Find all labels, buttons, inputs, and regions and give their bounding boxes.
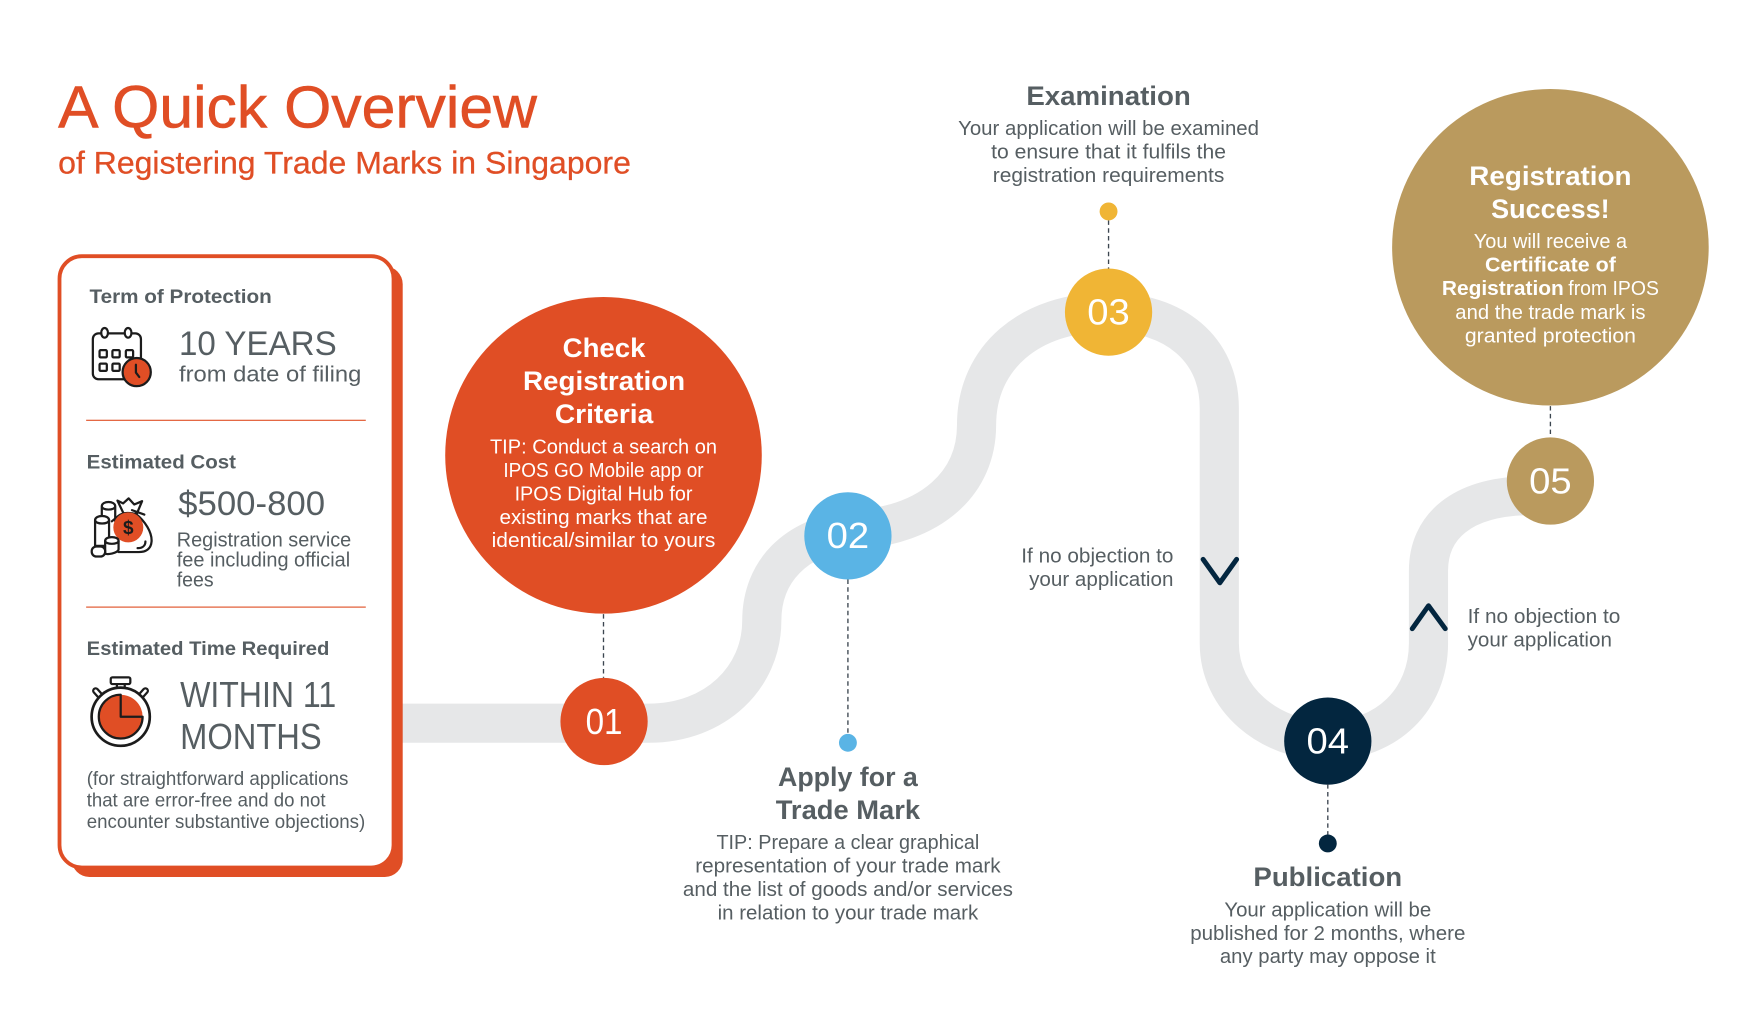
term of protection: Term of Protection <box>89 287 272 308</box>
estimated time required: encounter substantive objections) <box>87 812 365 833</box>
icon: calendar with clock <box>93 328 151 386</box>
connector and dot: step 3 <box>1100 202 1118 270</box>
text: apply for a trade mark: in relation to your trade mark <box>718 903 979 925</box>
marker 03 <box>1065 268 1152 356</box>
estimated time required: MONTHS <box>180 717 322 757</box>
text: apply for a trade mark: and the list of goods and/or services <box>683 879 1013 901</box>
text: apply for a trade mark: representation of your trade mark <box>695 856 1002 878</box>
marker 03: 03 <box>1087 292 1130 332</box>
term of protection: from date of filing <box>179 361 361 386</box>
text: publication: any party may oppose it <box>1220 946 1436 968</box>
arrow: up chevron <box>1412 606 1445 629</box>
title: of Registering Trade Marks in Singapore <box>58 145 631 180</box>
text: examination: registration requirements <box>993 165 1224 187</box>
icon: money bag and coins: $ <box>123 518 134 539</box>
note: if no objection, right <box>1468 606 1620 652</box>
estimated time required <box>87 639 365 833</box>
panel: registration success: granted protection <box>1465 326 1636 348</box>
panel: registration success <box>1392 89 1709 406</box>
panel: step 1 check registration criteria: Criteria <box>555 399 654 429</box>
term of protection <box>89 287 361 386</box>
marker 04 <box>1284 697 1371 785</box>
card body <box>60 256 394 868</box>
text: apply for a trade mark: Apply for a <box>778 762 919 792</box>
panel: registration success: Success! <box>1491 194 1610 224</box>
panel: step 1 check registration criteria: IPOS GO Mobile app or <box>503 460 704 482</box>
text: publication: Publication <box>1253 862 1402 892</box>
term of protection: 10 YEARS <box>179 325 337 363</box>
text: apply for a trade mark: Trade Mark <box>776 795 920 825</box>
panel: registration success: Certificate of <box>1485 255 1616 277</box>
text: apply for a trade mark <box>683 762 1013 925</box>
marker 02: 02 <box>827 516 869 556</box>
marker 01: 01 <box>586 702 623 742</box>
estimated time required: that are error-free and do not <box>87 791 326 812</box>
note: if no objection, right: your application <box>1468 630 1612 652</box>
divider <box>86 607 366 608</box>
card shadow <box>72 266 403 877</box>
winding road path <box>400 312 1533 741</box>
panel: step 1 check registration criteria: Check <box>563 333 646 363</box>
marker 02 <box>804 492 892 579</box>
connector: step 5 <box>1549 406 1551 437</box>
note: if no objection, left: your application <box>1029 569 1173 591</box>
estimated time required: WITHIN 11 <box>180 675 336 715</box>
note: if no objection, left <box>1021 545 1173 591</box>
estimated cost <box>87 452 351 592</box>
panel: step 1 check registration criteria: identical/similar to yours <box>492 530 715 552</box>
panel: step 1 check registration criteria: TIP: Conduct a search on <box>490 436 717 458</box>
panel: step 1 check registration criteria: IPOS Digital Hub for <box>515 483 693 505</box>
text: examination: Examination <box>1026 81 1191 111</box>
divider <box>86 420 366 421</box>
title <box>58 74 631 180</box>
estimated cost: fee including official <box>177 550 350 572</box>
estimated time required: (for straightforward applications <box>87 769 348 790</box>
title: A Quick Overview <box>58 74 537 141</box>
panel: registration success: You will receive a <box>1474 231 1628 253</box>
estimated time required: Estimated Time Required <box>87 639 329 660</box>
connector and dot: step 2 <box>839 579 857 752</box>
estimated cost: Estimated Cost <box>87 452 237 473</box>
marker 05: 05 <box>1529 461 1572 501</box>
estimated cost: $500-800 <box>178 485 325 523</box>
panel: registration success: Registration <box>1442 278 1564 300</box>
text: publication <box>1190 862 1465 968</box>
text: publication: published for 2 months, where <box>1190 923 1465 945</box>
text: examination: to ensure that it fulfils the <box>991 142 1226 164</box>
marker 01 <box>560 678 648 765</box>
panel: registration success: Registration <box>1469 161 1632 191</box>
note: if no objection, left: If no objection to <box>1021 545 1173 567</box>
marker 04: 04 <box>1307 721 1349 761</box>
icon: stopwatch <box>92 677 150 746</box>
panel: step 1 check registration criteria <box>445 297 762 614</box>
panel: key facts card <box>60 256 403 877</box>
connector: step 1 <box>602 614 604 678</box>
text: publication: Your application will be <box>1224 900 1431 922</box>
connector and dot: step 4 <box>1319 784 1337 852</box>
panel: registration success: and the trade mark is <box>1455 302 1645 324</box>
icon: money bag and coins <box>92 498 152 557</box>
panel: step 1 check registration criteria: Registration <box>523 366 685 396</box>
note: if no objection, right: If no objection to <box>1468 606 1620 628</box>
text: examination: Your application will be examined <box>958 118 1259 140</box>
estimated cost: Registration service <box>177 530 351 552</box>
panel: step 1 check registration criteria: existing marks that are <box>499 507 708 529</box>
arrow: down chevron <box>1203 559 1237 583</box>
text: apply for a trade mark: TIP: Prepare a clear graphical <box>716 832 979 854</box>
marker 05 <box>1507 437 1594 525</box>
text: examination <box>958 81 1259 187</box>
estimated cost: fees <box>177 570 214 592</box>
panel: registration success: from IPOS <box>1568 278 1659 300</box>
